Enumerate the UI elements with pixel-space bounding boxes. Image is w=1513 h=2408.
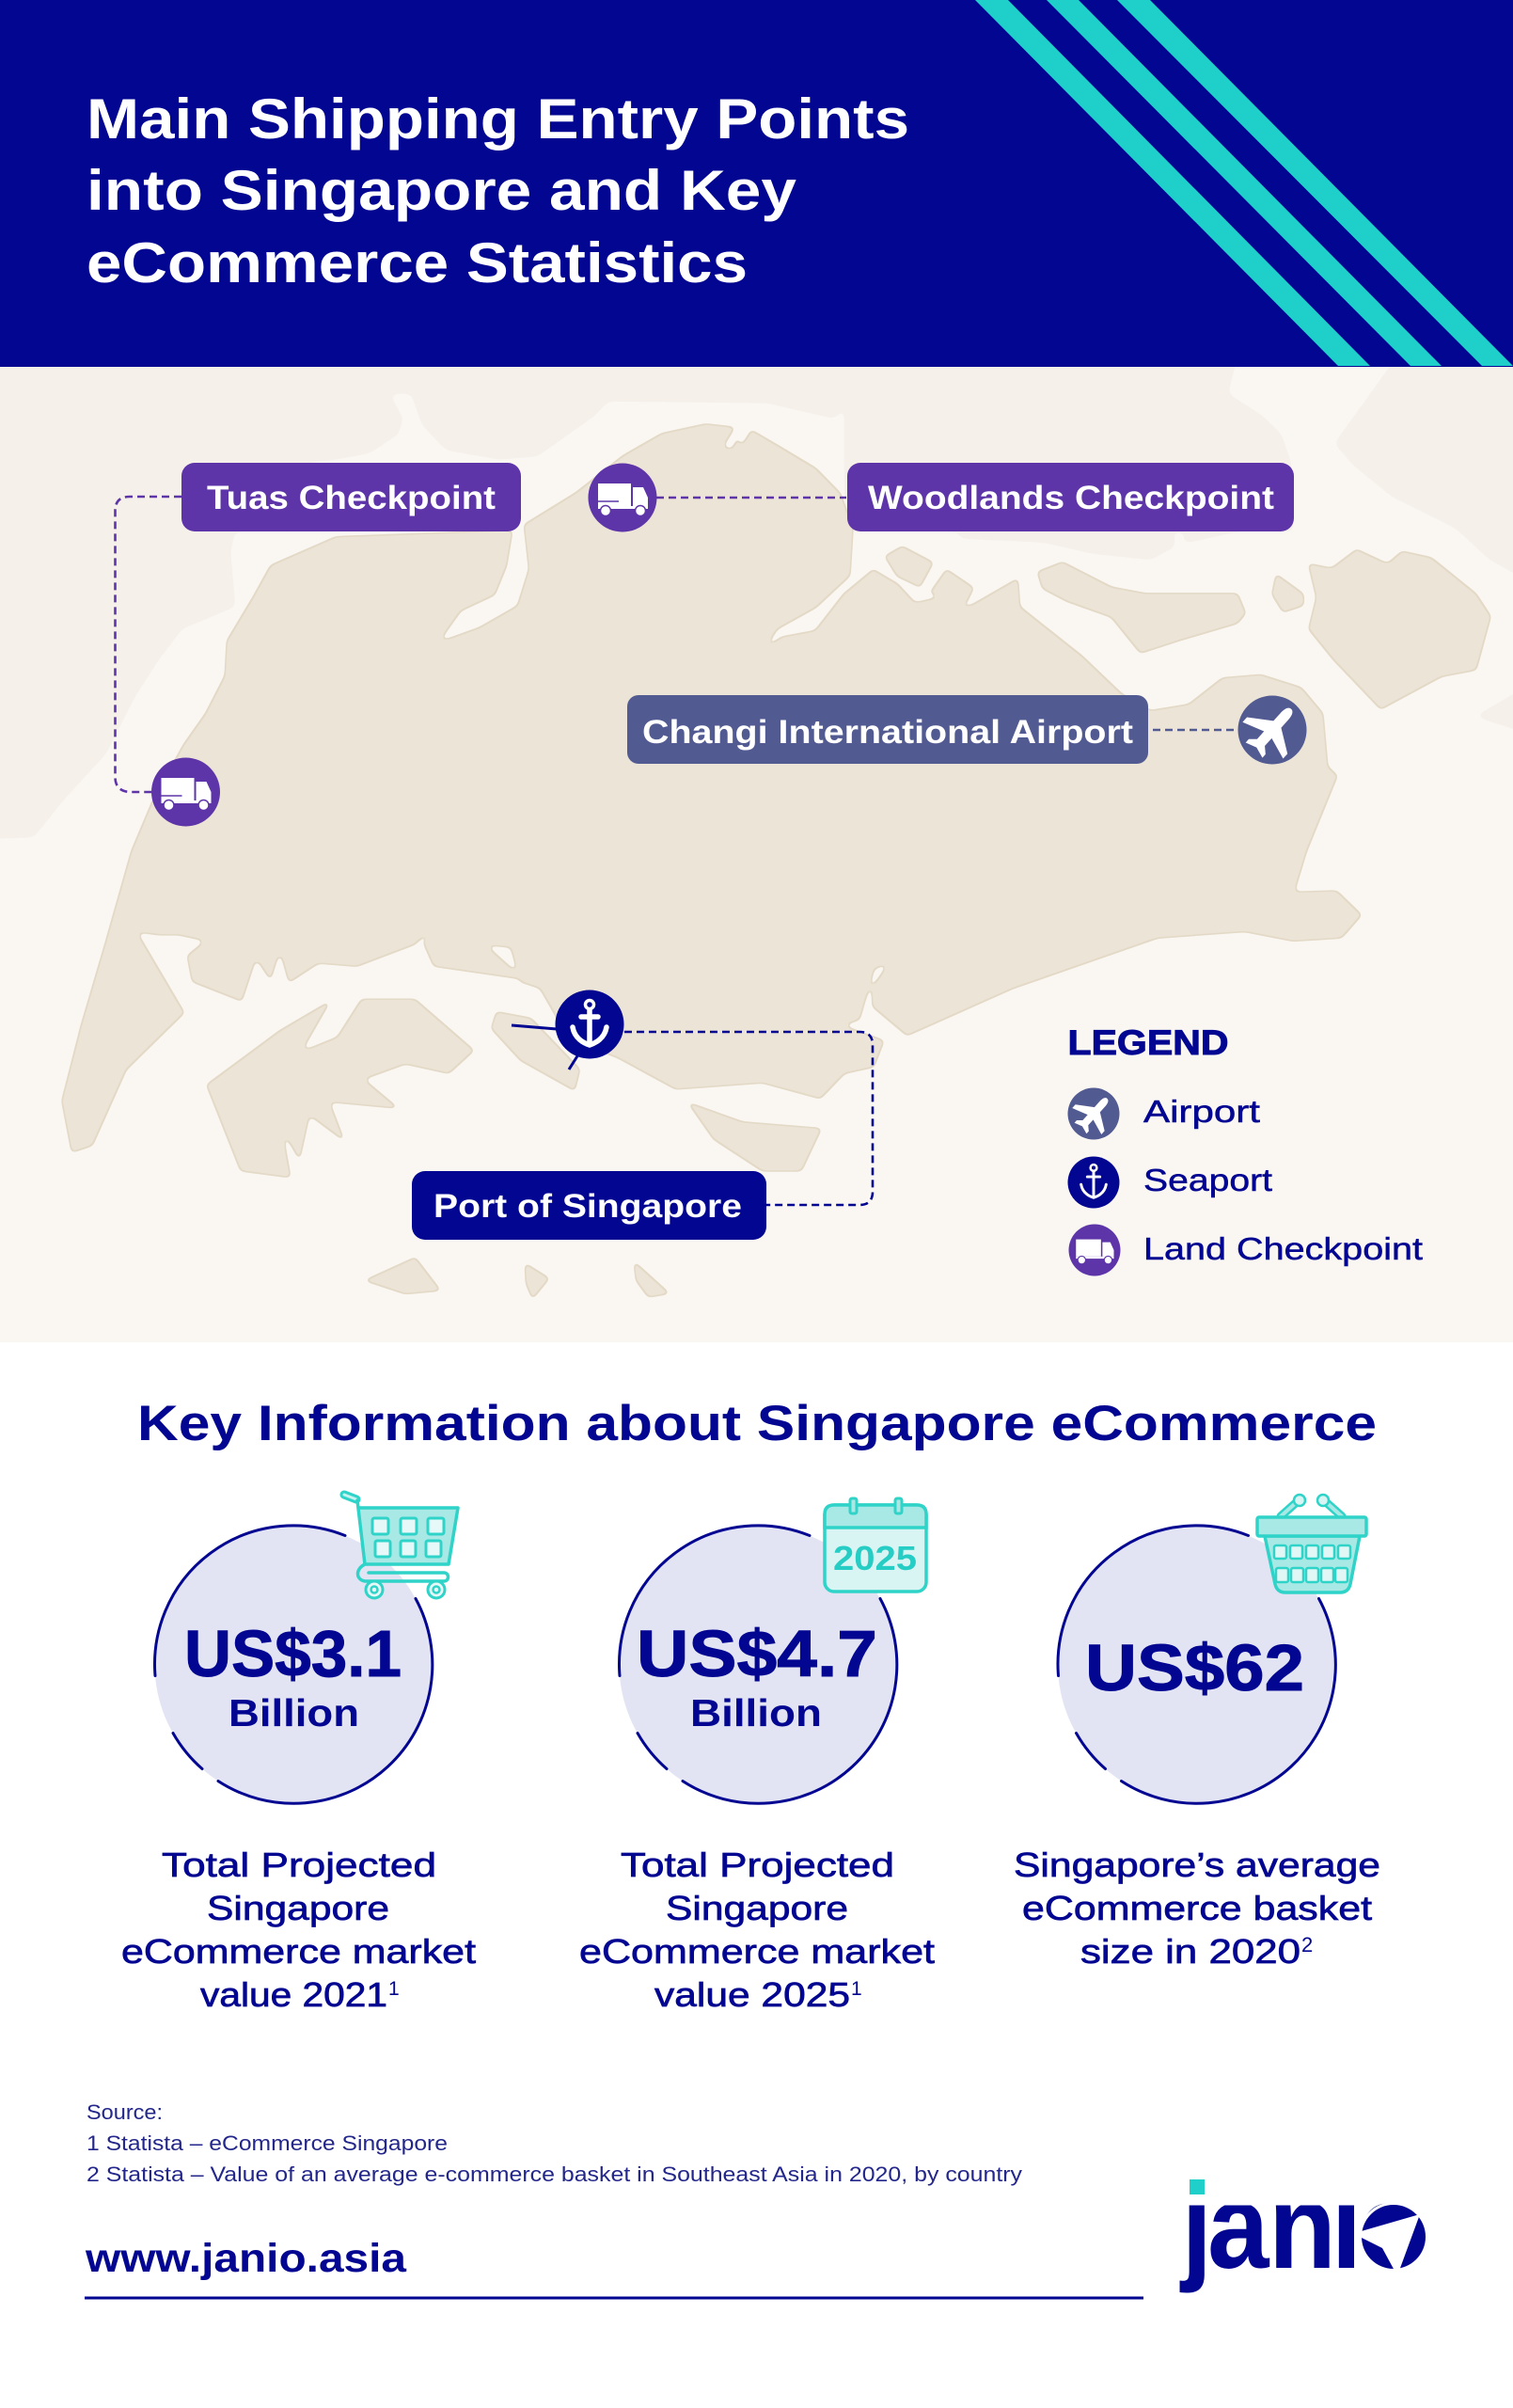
- stat caption: Total Projected: [621, 1846, 894, 1884]
- title: Main Shipping Entry Points: [87, 87, 909, 150]
- title: [87, 87, 909, 294]
- sources: 2 Statista – Value of an average e-commerce basket in Southeast Asia in 2020, by country: [87, 2162, 1022, 2186]
- icon: truck at Woodlands: [589, 463, 656, 532]
- stat caption: 2: [1301, 1933, 1313, 1956]
- map: Singapore land: [63, 425, 1489, 1297]
- label: Woodlands Checkpoint: [847, 463, 1294, 531]
- stat unit: Billion: [229, 1691, 359, 1735]
- icon: calendar 2025: 2025: [833, 1539, 917, 1577]
- sources: 1 Statista – eCommerce Singapore: [87, 2131, 448, 2155]
- stat value: US$4.7: [637, 1617, 877, 1690]
- stat caption: Singapore: [207, 1889, 389, 1927]
- sources: Source:: [87, 2100, 163, 2124]
- stat circle 1: [154, 1526, 433, 1803]
- stat caption: eCommerce basket: [1022, 1889, 1372, 1927]
- stat caption: [1014, 1846, 1380, 1971]
- connector: Tuas: [115, 497, 181, 792]
- legend: [1066, 1023, 1423, 1275]
- legend heading: LEGEND: [1068, 1023, 1228, 1062]
- stat caption: value 2021: [200, 1975, 387, 2014]
- stat circle 2: [619, 1526, 897, 1803]
- section heading: Key Information about Singapore eCommerce: [137, 1396, 1377, 1451]
- label: Changi International Airport: Changi International Airport: [642, 714, 1133, 751]
- legend: seaport: [1068, 1157, 1272, 1208]
- icon: calendar 2025: [825, 1498, 926, 1592]
- icon: shopping basket: [1257, 1495, 1366, 1592]
- connector: Port: [624, 1032, 873, 1205]
- stat caption: Singapore’s average: [1014, 1846, 1380, 1884]
- stat caption: [579, 1846, 935, 2014]
- logo: janio: janio: [1180, 2161, 1425, 2294]
- title: into Singapore and Key: [87, 159, 797, 222]
- legend: land checkpoint: [1068, 1225, 1423, 1275]
- stat value: US$62: [1085, 1631, 1304, 1704]
- stat circle 3: [1058, 1526, 1335, 1803]
- stat caption: 1: [851, 1978, 862, 2000]
- stat caption: Singapore: [666, 1889, 848, 1927]
- icon: anchor at Port: [512, 990, 624, 1069]
- icon: truck at Tuas: [151, 758, 220, 826]
- label: Tuas Checkpoint: Tuas Checkpoint: [207, 480, 496, 516]
- icon: shopping cart: [344, 1495, 458, 1598]
- stat unit: Billion: [690, 1691, 822, 1735]
- label: Woodlands Checkpoint: Woodlands Checkpoint: [868, 480, 1274, 516]
- stat caption: eCommerce market: [121, 1932, 476, 1971]
- stat value: US$3.1: [184, 1617, 402, 1690]
- header banner: [0, 0, 1513, 367]
- sources: [87, 2100, 1022, 2186]
- icon: plane at Changi: [1234, 690, 1312, 768]
- website url: www.janio.asia: [85, 2236, 407, 2281]
- legend: land checkpoint: Land Checkpoint: [1143, 1231, 1423, 1266]
- stat caption: [121, 1846, 476, 2014]
- label: Tuas Checkpoint: [181, 463, 521, 531]
- stat card: US$4.7 Billion: [579, 1498, 935, 2014]
- stat card: US$3.1 Billion: [121, 1495, 476, 2014]
- legend: seaport: Seaport: [1143, 1163, 1272, 1197]
- label: Port of Singapore: Port of Singapore: [433, 1188, 742, 1225]
- legend: airport: [1066, 1085, 1260, 1141]
- connector: Changi: [1153, 729, 1237, 731]
- stat caption: 1: [388, 1978, 400, 2000]
- stat caption: value 2025: [654, 1975, 850, 2014]
- stat caption: Total Projected: [162, 1846, 436, 1884]
- stat caption: eCommerce market: [579, 1932, 935, 1971]
- legend: airport: Airport: [1143, 1094, 1260, 1129]
- panel: map: [0, 356, 1513, 1342]
- title: eCommerce Statistics: [87, 231, 748, 294]
- label: Port of Singapore: [412, 1171, 766, 1240]
- stat caption: size in 2020: [1080, 1932, 1300, 1971]
- label: Changi International Airport: [627, 695, 1148, 764]
- connector: Woodlands: [656, 497, 846, 499]
- stat card: US$62: [1014, 1495, 1380, 1971]
